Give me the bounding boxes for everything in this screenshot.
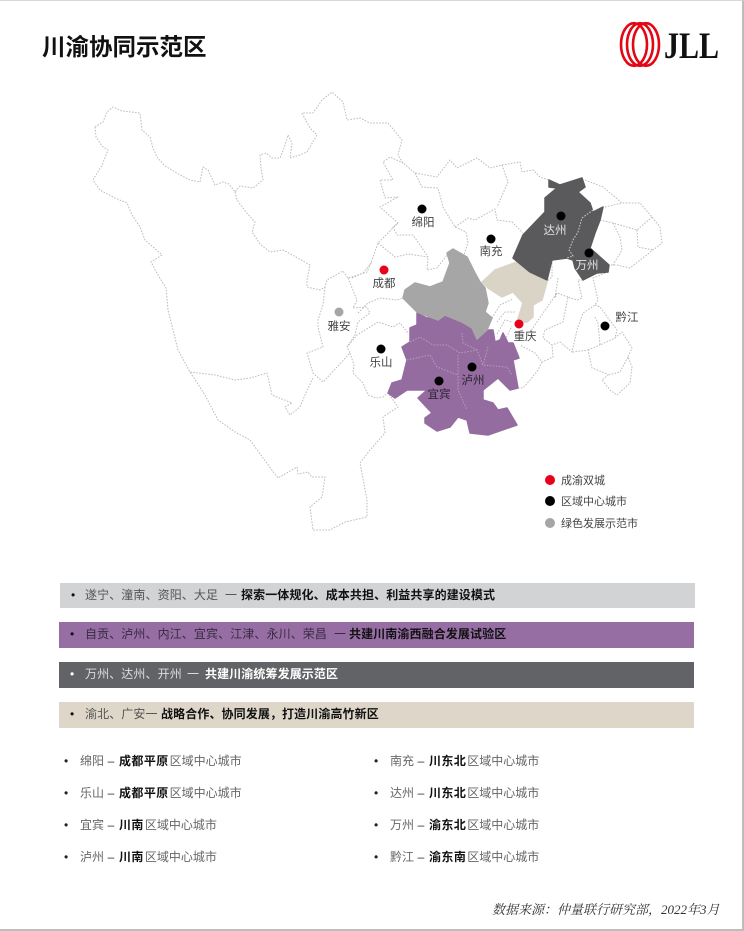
list: right column: • — [374, 754, 378, 768]
legend — [545, 473, 638, 530]
city markers and labels: 黔江 — [616, 310, 639, 324]
bar: 川南渝西融合发展试验区: • — [70, 627, 74, 641]
list: left column: • — [64, 786, 68, 800]
region: 川南渝西 purple — [388, 313, 519, 435]
list item: – — [108, 786, 114, 800]
bar: 川渝统筹发展示范区 — [59, 662, 694, 688]
bar: 川南渝西融合发展试验区: 自贡、泸州、内江、宜宾、江津、永川、荣昌 — [85, 627, 327, 641]
list item: – — [418, 754, 424, 768]
city markers and labels: 成都 — [372, 277, 396, 290]
list item: 绵阳 成都平原区域中心城市 — [80, 754, 242, 768]
list item: 万州 渝东北区域中心城市 — [390, 818, 539, 832]
bar: 川渝统筹发展示范区: 一 — [187, 667, 199, 681]
title: 川渝协同示范区 — [42, 34, 206, 60]
bar: 川渝高竹新区: 渝北、广安一 战略合作、协同发展，打造川渝高竹新区 — [85, 707, 379, 721]
list: right column — [374, 754, 539, 864]
city markers and labels: 万州 — [576, 259, 598, 272]
bar: 川南渝西融合发展试验区: 一 — [334, 627, 346, 641]
city markers and labels: 泸州 — [462, 374, 484, 387]
list item: – — [418, 818, 424, 832]
bar: 川渝统筹发展示范区: • — [70, 667, 74, 681]
city markers and labels: 达州 — [544, 223, 566, 237]
legend: 绿色发展示范市 — [561, 516, 638, 530]
list item: 宜宾 川南区域中心城市 — [80, 818, 217, 832]
bar: 探索一体规化: 探索一体规化、成本共担、利益共享的建设模式 — [241, 588, 495, 602]
region: 渝北广安 beige — [482, 262, 547, 322]
bar: 探索一体规化: 遂宁、潼南、资阳、大足 — [85, 588, 218, 602]
list: left column: • — [64, 818, 68, 832]
list item: 南充 川东北区域中心城市 — [390, 754, 539, 768]
list item: – — [108, 850, 114, 864]
list item: 黔江 渝东南区域中心城市 — [390, 850, 539, 864]
list item: 乐山 成都平原区域中心城市 — [80, 786, 242, 800]
city markers and labels: 南充 — [480, 244, 503, 258]
list item: – — [418, 850, 424, 864]
bar: 川渝高竹新区: • — [70, 707, 74, 721]
bar: 川渝高竹新区 — [59, 702, 694, 728]
region: 万州达州开州 dark — [513, 178, 609, 280]
list: right column: • — [374, 786, 378, 800]
outer and county boundaries — [93, 92, 662, 530]
list: right column: • — [374, 850, 378, 864]
city markers and labels: 绵阳 — [412, 215, 434, 229]
list: right column: • — [374, 818, 378, 832]
city markers and labels: 雅安 — [328, 319, 350, 333]
list item: – — [418, 786, 424, 800]
bar: 川南渝西融合发展试验区: 共建川南渝西融合发展试验区 — [349, 627, 506, 641]
bar: 探索一体规化: 一 — [225, 588, 237, 602]
bar: 川渝统筹发展示范区: 共建川渝统筹发展示范区 — [205, 667, 338, 681]
bar: 川南渝西融合发展试验区 — [59, 622, 694, 648]
bar: 探索一体规化: • — [71, 588, 75, 602]
list item: – — [108, 818, 114, 832]
legend: 成渝双城 — [561, 473, 605, 487]
source note: 数据来源：仲量联行研究部，2022年3月 — [492, 902, 720, 917]
list item: 达州 川东北区域中心城市 — [390, 786, 539, 800]
list: left column: • — [64, 850, 68, 864]
region: 遂宁潼南资阳大足 grey — [403, 249, 492, 339]
legend: 区域中心城市 — [561, 494, 627, 508]
city markers and labels — [328, 204, 639, 401]
list item: 泸州 川南区域中心城市 — [80, 850, 217, 864]
list item: – — [108, 754, 114, 768]
bar: 川渝统筹发展示范区: 万州、达州、开州 — [85, 667, 182, 681]
list: left column: • — [64, 754, 68, 768]
city markers and labels: 乐山 — [370, 356, 392, 369]
logo: JLL — [621, 23, 719, 67]
list: left column — [64, 754, 242, 864]
city markers and labels: 重庆 — [514, 329, 537, 343]
bar: 探索一体规化 — [60, 583, 695, 608]
logo: JLL: JLL — [664, 26, 719, 67]
city markers and labels: 宜宾 — [428, 387, 450, 401]
